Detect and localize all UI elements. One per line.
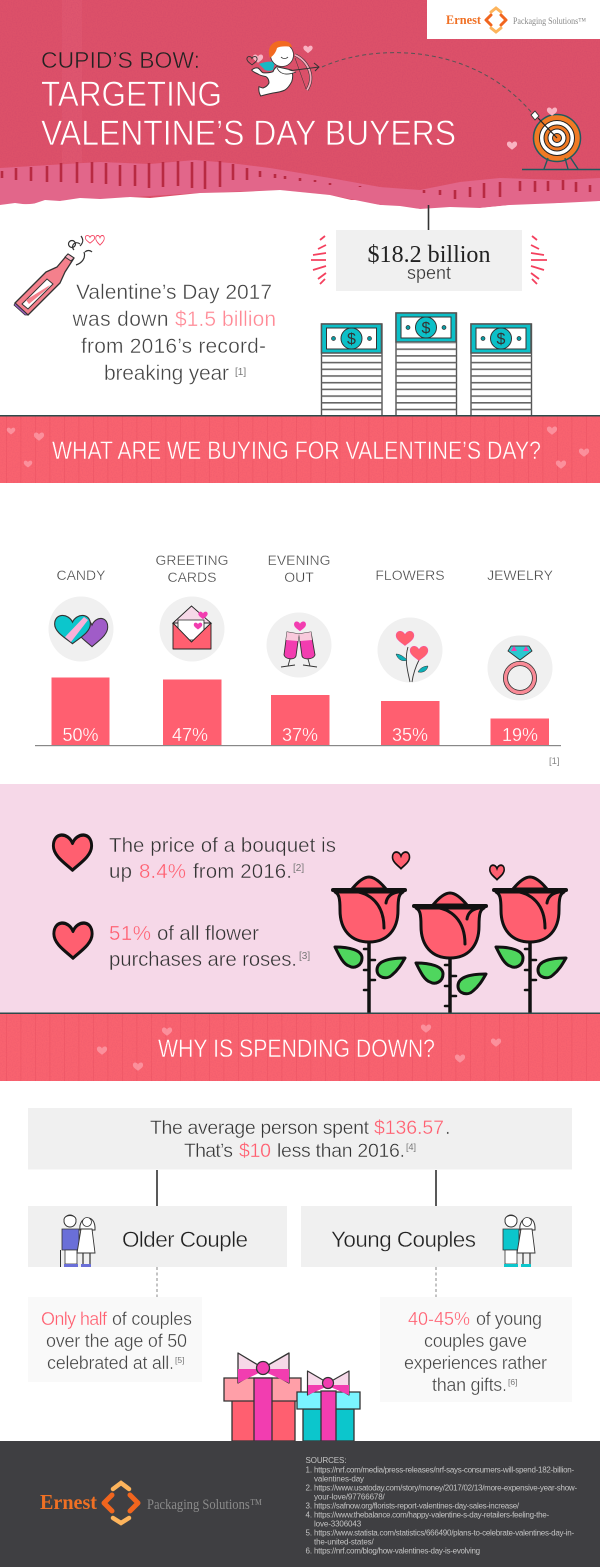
- footer logo: [40, 1483, 262, 1523]
- text: bouquet price: up: [109, 860, 132, 883]
- logo box top right: [427, 0, 600, 39]
- text box: older couples fact: of couples: [112, 1309, 192, 1329]
- text box: young couples fact: [380, 1297, 572, 1402]
- footer logo: Ernest: [40, 1490, 97, 1514]
- chart: what we buy: [35, 552, 561, 767]
- text: down 1.5 billion: [72, 281, 276, 385]
- text: bouquet price: The price of a bouquet is: [109, 834, 336, 857]
- icon: target: [507, 108, 600, 170]
- icon: older couple: [60, 1215, 95, 1267]
- callout: $18.2 billion spent: spent: [407, 263, 451, 283]
- sources list: 4.: [306, 1510, 312, 1520]
- callout: average spend: .: [445, 1117, 450, 1139]
- section banner: why is spending down: WHY IS SPENDING DOWN?: [158, 1035, 435, 1063]
- section banner: why is spending down: [0, 1012, 600, 1081]
- callout: average spend: [28, 1108, 572, 1170]
- chart labels: GREETING: [155, 552, 229, 568]
- icon: ring: [488, 636, 552, 700]
- text: rose share: 51%: [109, 922, 151, 945]
- callout: average spend: [4]: [406, 1142, 416, 1152]
- sources list: 6.: [306, 1546, 312, 1556]
- callout: average spend: That’s: [184, 1140, 233, 1162]
- panel: older couple: Older Couple: [122, 1227, 248, 1252]
- callout: average spend: The average person spent: [150, 1117, 370, 1139]
- panel: flower facts: [0, 784, 600, 1013]
- dashed connectors: [157, 1267, 436, 1297]
- bar: greeting cards: 47%: [172, 725, 208, 745]
- text: bouquet price: [2]: [293, 863, 304, 874]
- dashed arrow path: [322, 53, 532, 113]
- callout: $18.2 billion spent: [336, 230, 522, 291]
- icon: heart bullet one: [53, 835, 92, 870]
- sources list: the-united-states/: [314, 1538, 375, 1546]
- icon: cupid: [247, 41, 319, 96]
- bar: evening out: 37%: [282, 725, 318, 745]
- text: bouquet price: [109, 834, 336, 883]
- text box: older couples fact: celebrated at all.: [47, 1353, 174, 1373]
- icon: young couple: [503, 1215, 535, 1267]
- callout: average spend: $10: [239, 1140, 271, 1162]
- text: rose share: [109, 922, 310, 971]
- icon: heart flowers: [378, 618, 442, 682]
- logo box top right: Ernest: [446, 12, 482, 27]
- text: bouquet price: from 2016.: [193, 860, 292, 883]
- text: down 1.5 billion: breaking year: [104, 362, 229, 385]
- sources list: https://safnow.org/florists-report-valentines-day-sales-increase/: [314, 1502, 520, 1510]
- text box: older couples fact: Only half: [41, 1309, 108, 1329]
- chart source note: [1]: [549, 756, 560, 767]
- sources list: 1.: [306, 1466, 312, 1474]
- sources list: [306, 1456, 577, 1556]
- text box: young couples fact: of young: [476, 1309, 542, 1329]
- chart labels: [56, 552, 554, 585]
- sources list: SOURCES:: [306, 1456, 346, 1465]
- sources list: love-3306043: [314, 1520, 362, 1528]
- icon: rays left: [311, 236, 326, 284]
- text: down 1.5 billion: was down: [72, 308, 168, 331]
- text box: young couples fact: than gifts.: [432, 1375, 507, 1395]
- panel: young couples: Young Couples: [331, 1227, 476, 1252]
- sources list: https://www.statista.com/statistics/666490/plans-to-celebrate-valentines-day-in-: [314, 1528, 574, 1538]
- bar: flowers: 35%: [392, 725, 428, 745]
- logo box top right: Packaging Solutions™: [513, 16, 586, 26]
- title: TARGETING: [41, 75, 222, 114]
- connector line to total spent: [428, 205, 430, 230]
- chart labels: CANDY: [56, 567, 106, 583]
- bar: jewelry: [490, 718, 549, 745]
- sources list: https://www.thebalance.com/happy-valentine-s-day-retailers-feeling-the-: [314, 1510, 549, 1520]
- chart labels: EVENING: [267, 552, 331, 568]
- panel: older couple: [28, 1206, 287, 1267]
- header banner: torn red paper: [0, 0, 600, 215]
- chart labels: CARDS: [167, 569, 217, 585]
- icon: rays right: [531, 236, 547, 284]
- bar: candy: [52, 678, 110, 745]
- title: CUPID’S BOW:: [41, 47, 200, 73]
- footer: [0, 1441, 600, 1567]
- text box: older couples fact: [28, 1297, 202, 1382]
- text box: young couples fact: experiences rather: [404, 1353, 547, 1373]
- callout: average spend: less than 2016.: [277, 1140, 405, 1162]
- text box: young couples fact: 40-45%: [408, 1309, 470, 1329]
- text: down 1.5 billion: [1]: [235, 367, 246, 378]
- text box: older couples fact: [5]: [175, 1355, 184, 1365]
- text box: older couples fact: over the age of 50: [46, 1331, 187, 1351]
- chart labels: OUT: [284, 569, 314, 585]
- icon: roses: [333, 852, 566, 1013]
- text box: young couples fact: [6]: [508, 1377, 517, 1387]
- callout: average spend: $136.57: [374, 1117, 444, 1139]
- text: rose share: of all flower: [157, 922, 259, 945]
- connector lines to couple panels: [157, 1170, 436, 1206]
- icon: money stacks: [322, 313, 532, 416]
- section banner: what are we buying: [0, 415, 600, 483]
- sources list: valentines-day: [314, 1474, 364, 1484]
- sources list: your-love/97766678/: [314, 1492, 386, 1502]
- chart labels: FLOWERS: [375, 567, 445, 583]
- sources list: https://nrf.com/media/press-releases/nrf-says-consumers-will-spend-182-billion-: [314, 1466, 574, 1474]
- text: rose share: purchases are roses.: [109, 948, 297, 971]
- text box: young couples fact: couples gave: [424, 1331, 527, 1351]
- bar: candy: 50%: [62, 725, 99, 745]
- chart labels: JEWELRY: [487, 567, 554, 583]
- footer logo: Packaging Solutions™: [147, 1497, 262, 1513]
- icon: envelope: [160, 596, 224, 662]
- panel: young couples: [301, 1206, 572, 1267]
- icon: champagne bottle: [14, 235, 104, 315]
- text: rose share: [3]: [299, 951, 310, 962]
- title: VALENTINE’S DAY BUYERS: [41, 114, 456, 153]
- icon: heart bullet two: [54, 923, 92, 958]
- bar: flowers: [381, 701, 440, 745]
- bar: jewelry: 19%: [502, 725, 538, 745]
- sources list: 5.: [306, 1528, 312, 1538]
- callout: $18.2 billion spent: $18.2 billion: [368, 242, 490, 268]
- text: down 1.5 billion: $1.5 billion: [175, 308, 276, 331]
- text: down 1.5 billion: from 2016’s record-: [81, 335, 266, 358]
- bar: greeting cards: [163, 680, 222, 745]
- icon: candy hearts: [48, 596, 114, 662]
- sources list: https://www.usatoday.com/story/money/2017/02/13/more-expensive-year-show-: [314, 1484, 577, 1492]
- sources list: https://nrf.com/blog/how-valentines-day-is-evolving: [314, 1546, 480, 1556]
- bar: evening out: [271, 695, 330, 745]
- title: [41, 47, 456, 153]
- text: down 1.5 billion: Valentine’s Day 2017: [76, 281, 272, 304]
- sources list: 3.: [306, 1502, 312, 1510]
- icon: champagne glasses: [266, 612, 332, 678]
- text: bouquet price: 8.4%: [139, 860, 186, 883]
- sources list: 2.: [306, 1484, 312, 1492]
- icon: gift boxes: [224, 1353, 360, 1441]
